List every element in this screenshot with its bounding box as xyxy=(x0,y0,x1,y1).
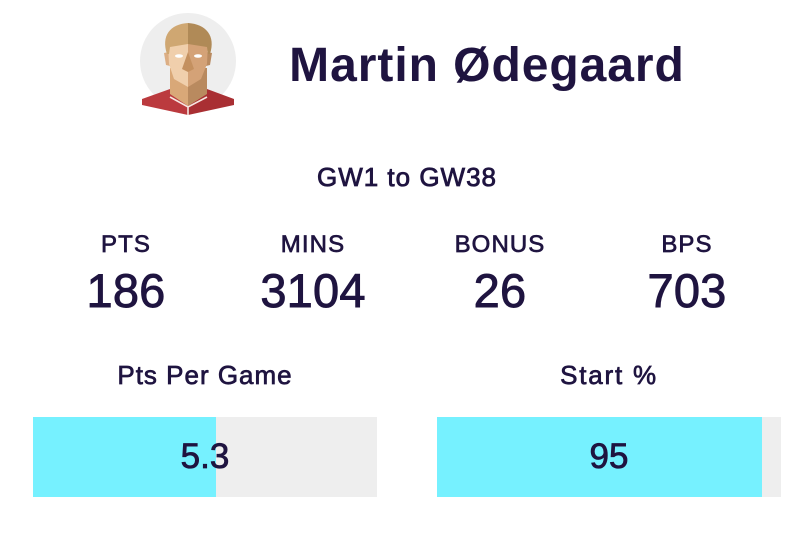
stat: bonus: 26 xyxy=(474,264,526,317)
bar: points per game: 5.3 xyxy=(181,437,229,476)
stat: points: 186 xyxy=(86,264,166,317)
bar: start percentage xyxy=(437,417,781,497)
bar: points per game xyxy=(33,417,377,497)
stat: minutes: 3104 xyxy=(260,264,366,317)
stat: points xyxy=(86,231,166,317)
stat: bps: 703 xyxy=(647,264,727,317)
stat: points: PTS xyxy=(101,231,151,258)
stat: minutes xyxy=(260,231,366,317)
heading: start percentage: Start % xyxy=(560,360,658,390)
bar: start percentage: 95 xyxy=(590,437,628,476)
subtitle: gameweek range: GW1 to GW38 xyxy=(317,162,497,192)
stat: bps: BPS xyxy=(661,231,713,258)
heading: points per game: Pts Per Game xyxy=(117,360,293,390)
icon: player avatar xyxy=(140,13,236,115)
title: player name: Martin Ødegaard xyxy=(289,39,685,92)
stat: minutes: MINS xyxy=(281,231,345,258)
stat: bonus xyxy=(455,231,545,317)
stat: bps xyxy=(647,231,727,317)
stat: bonus: BONUS xyxy=(455,231,545,258)
